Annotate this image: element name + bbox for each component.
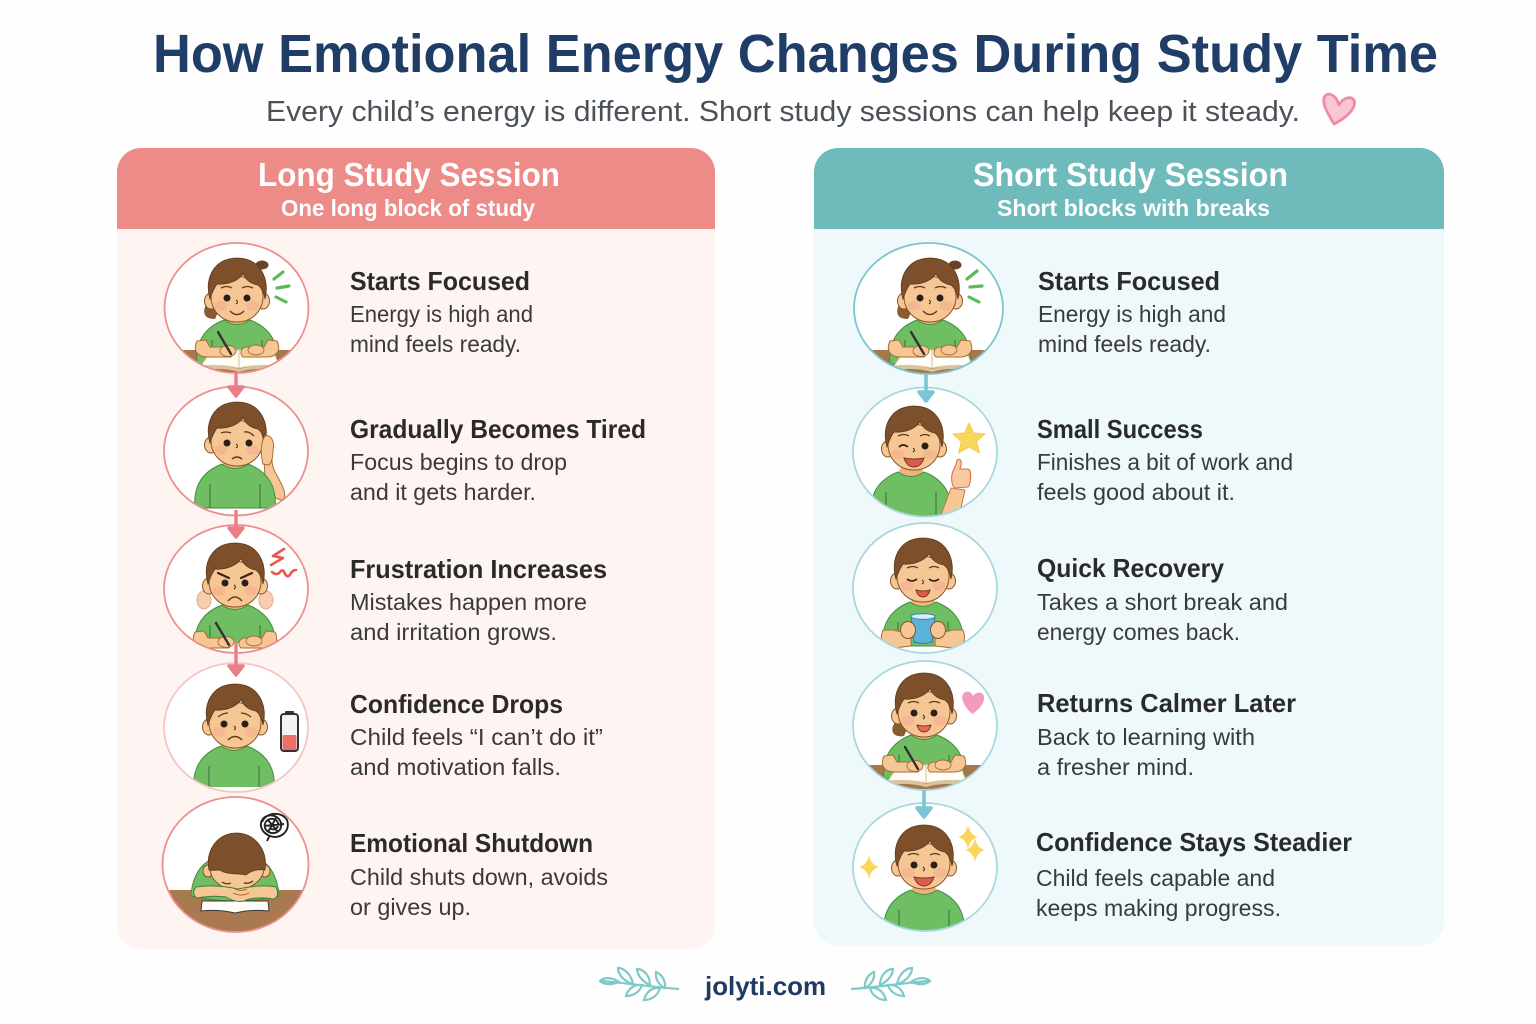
step text: Energy is high and — [1038, 301, 1226, 327]
icon: frustrated child — [164, 525, 308, 653]
icon: heart — [1324, 94, 1354, 124]
arrow: tired to frustration — [229, 510, 243, 537]
icon: right sprig — [851, 968, 930, 1000]
arrow: frustration to confidence drop — [229, 642, 243, 675]
step text: and it gets harder. — [350, 479, 536, 505]
panel header: long — [117, 148, 715, 229]
icon: sad child with low battery — [164, 663, 308, 797]
panel header: short: Short blocks with breaks — [997, 195, 1270, 221]
step text: Child feels “I can’t do it” — [350, 724, 603, 750]
step text: Back to learning with — [1037, 724, 1255, 750]
tangled thought scribble — [261, 814, 288, 841]
step text: and irritation grows. — [350, 619, 557, 645]
icon: calm child writing with heart — [853, 661, 997, 795]
step heading: Emotional Shutdown — [350, 828, 593, 858]
step text: and motivation falls. — [350, 754, 561, 780]
step: confidence stays steadier — [853, 803, 1352, 934]
step text: mind feels ready. — [1038, 331, 1211, 357]
step text: Finishes a bit of work and — [1037, 449, 1293, 475]
panel header: long: One long block of study — [281, 195, 535, 221]
step: quick recovery — [853, 523, 1288, 653]
arrow: calmer to confidence — [917, 790, 931, 817]
icon: resting child with blue cup — [853, 523, 997, 653]
icon: focused child writing — [854, 243, 1003, 380]
panel header: short: Short Study Session — [973, 156, 1288, 193]
step heading: Frustration Increases — [350, 554, 607, 584]
step text: a fresher mind. — [1037, 754, 1194, 780]
step heading: Small Success — [1037, 414, 1203, 444]
step text: keeps making progress. — [1036, 895, 1281, 921]
icon: focused child writing — [164, 243, 308, 380]
step: returns calmer later — [853, 661, 1296, 795]
panel header: long: Long Study Session — [258, 156, 560, 193]
step text: Focus begins to drop — [350, 449, 567, 475]
step: confidence drops — [164, 663, 603, 797]
footer — [600, 968, 930, 1001]
step heading: Confidence Drops — [350, 689, 563, 719]
icon: child head down on book — [160, 797, 310, 935]
step text: Mistakes happen more — [350, 589, 587, 615]
step: gradually becomes tired — [164, 386, 646, 516]
subtitle: Every child’s energy is different. Short study sessions can help keep it steady. — [266, 96, 1300, 128]
arrow: focused to small success — [919, 374, 933, 401]
step text: Child feels capable and — [1036, 865, 1275, 891]
panel: short study session — [814, 148, 1444, 946]
step heading: Gradually Becomes Tired — [350, 414, 646, 444]
arrow: focused to tired — [229, 372, 243, 396]
step text: Child shuts down, avoids — [350, 864, 608, 890]
step text: feels good about it. — [1037, 479, 1235, 505]
step text: mind feels ready. — [350, 331, 521, 357]
step heading: Returns Calmer Later — [1037, 688, 1296, 718]
step text: Energy is high and — [350, 301, 533, 327]
panel header: short — [814, 148, 1444, 229]
step text: energy comes back. — [1037, 619, 1240, 645]
icon: happy child with sparkles — [853, 803, 997, 934]
step heading: Starts Focused — [350, 266, 530, 296]
step heading: Confidence Stays Steadier — [1036, 827, 1352, 857]
title: How Emotional Energy Changes During Study Time — [153, 24, 1438, 84]
step: small success — [853, 388, 1293, 516]
step: frustration increases — [164, 525, 607, 653]
step text: Takes a short break and — [1037, 589, 1288, 615]
icon: left sprig — [600, 968, 679, 1000]
step: starts focused — [854, 243, 1226, 380]
step heading: Quick Recovery — [1037, 553, 1225, 583]
step text: or gives up. — [350, 894, 471, 920]
panel: long study session — [117, 148, 715, 949]
website label: jolyti.com — [704, 971, 826, 1001]
icon: winking child with star and thumbs up — [853, 388, 997, 516]
step: emotional shutdown — [160, 797, 608, 935]
step heading: Starts Focused — [1038, 266, 1220, 296]
step: starts focused — [164, 243, 533, 380]
icon: tired child — [164, 386, 308, 516]
